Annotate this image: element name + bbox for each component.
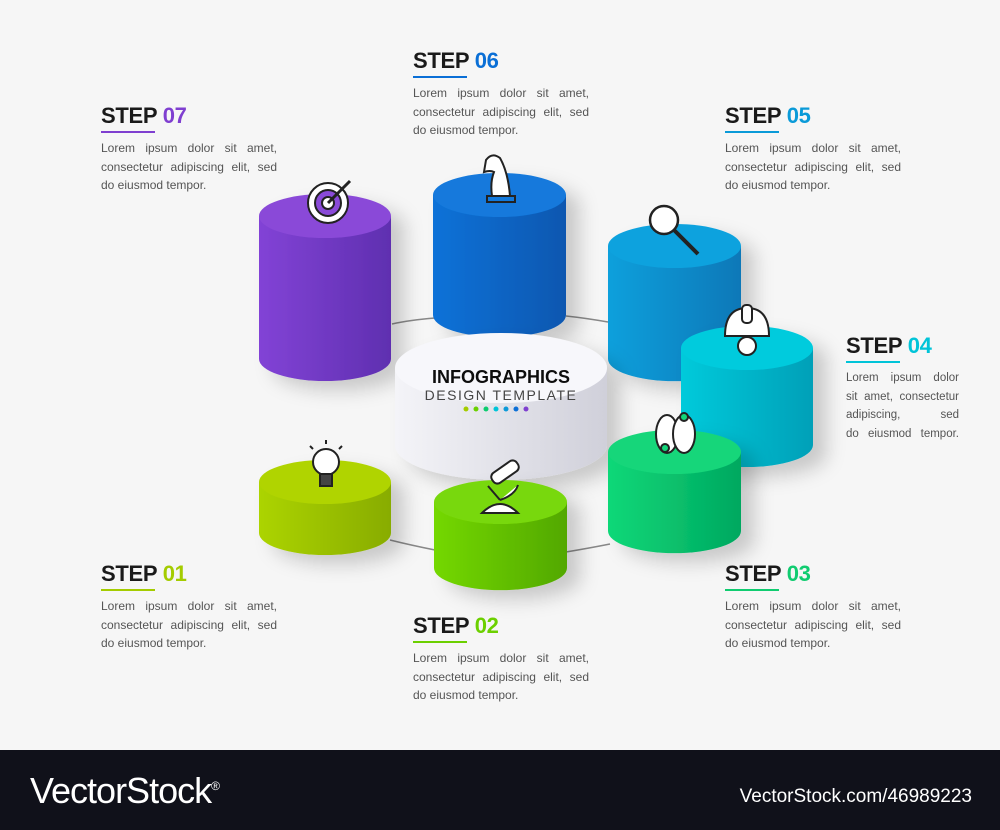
cylinder 7 (259, 194, 391, 381)
cylinder 4 (681, 326, 813, 467)
footer: VectorStock® (30, 770, 219, 811)
step 05 (725, 103, 901, 192)
icon: microscope (482, 458, 521, 513)
step 04: adipiscing, sed (846, 409, 959, 421)
cylinder 6 (433, 173, 566, 337)
step 05: STEP 05 (725, 103, 811, 128)
step 02 (413, 613, 589, 702)
step 05: Lorem ipsum dolor sit amet, consectetur adipiscing elit, sed do eiusmod tempor. (725, 141, 901, 192)
step 01: STEP 01 (101, 561, 187, 586)
footer (0, 750, 1000, 830)
arrows (390, 316, 610, 552)
step 03: STEP 03 (725, 561, 811, 586)
cylinder 5 (608, 224, 741, 381)
center cylinder: DESIGN TEMPLATE (425, 387, 577, 403)
cylinder 3 (608, 430, 741, 553)
step 04: sit amet, consectetur (846, 390, 959, 402)
cylinder 1 (259, 460, 391, 555)
step 07: STEP 07 (101, 103, 187, 128)
step 04: STEP 04 (846, 333, 932, 358)
icon: brain (656, 413, 695, 453)
step 06: STEP 06 (413, 48, 499, 73)
step 01 (101, 561, 277, 650)
step 01: Lorem ipsum dolor sit amet, consectetur adipiscing elit, sed do eiusmod tempor. (101, 599, 277, 650)
center cylinder (395, 333, 607, 480)
step 03: Lorem ipsum dolor sit amet, consectetur adipiscing elit, sed do eiusmod tempor. (725, 599, 901, 650)
footer: VectorStock.com/46989223 (740, 786, 972, 807)
step 02: STEP 02 (413, 613, 499, 638)
step 06 (413, 48, 589, 137)
cylinder 2 (434, 480, 567, 590)
icon: bulb (310, 440, 342, 486)
icon: helmet gear (725, 305, 769, 355)
step 02: Lorem ipsum dolor sit amet, consectetur adipiscing elit, sed do eiusmod tempor. (413, 651, 589, 702)
icon: target (308, 181, 350, 223)
icon: magnifier (650, 206, 698, 254)
step 04: Lorem ipsum dolor (846, 372, 959, 384)
step 07 (101, 103, 277, 192)
step 06: Lorem ipsum dolor sit amet, consectetur adipiscing elit, sed do eiusmod tempor. (413, 86, 589, 137)
step 03 (725, 561, 901, 650)
icon: chess knight (484, 155, 515, 202)
center cylinder: INFOGRAPHICS (432, 367, 570, 387)
step 04 (846, 333, 959, 440)
step 04: do eiusmod tempor. (846, 428, 959, 440)
step 07: Lorem ipsum dolor sit amet, consectetur adipiscing elit, sed do eiusmod tempor. (101, 141, 277, 192)
